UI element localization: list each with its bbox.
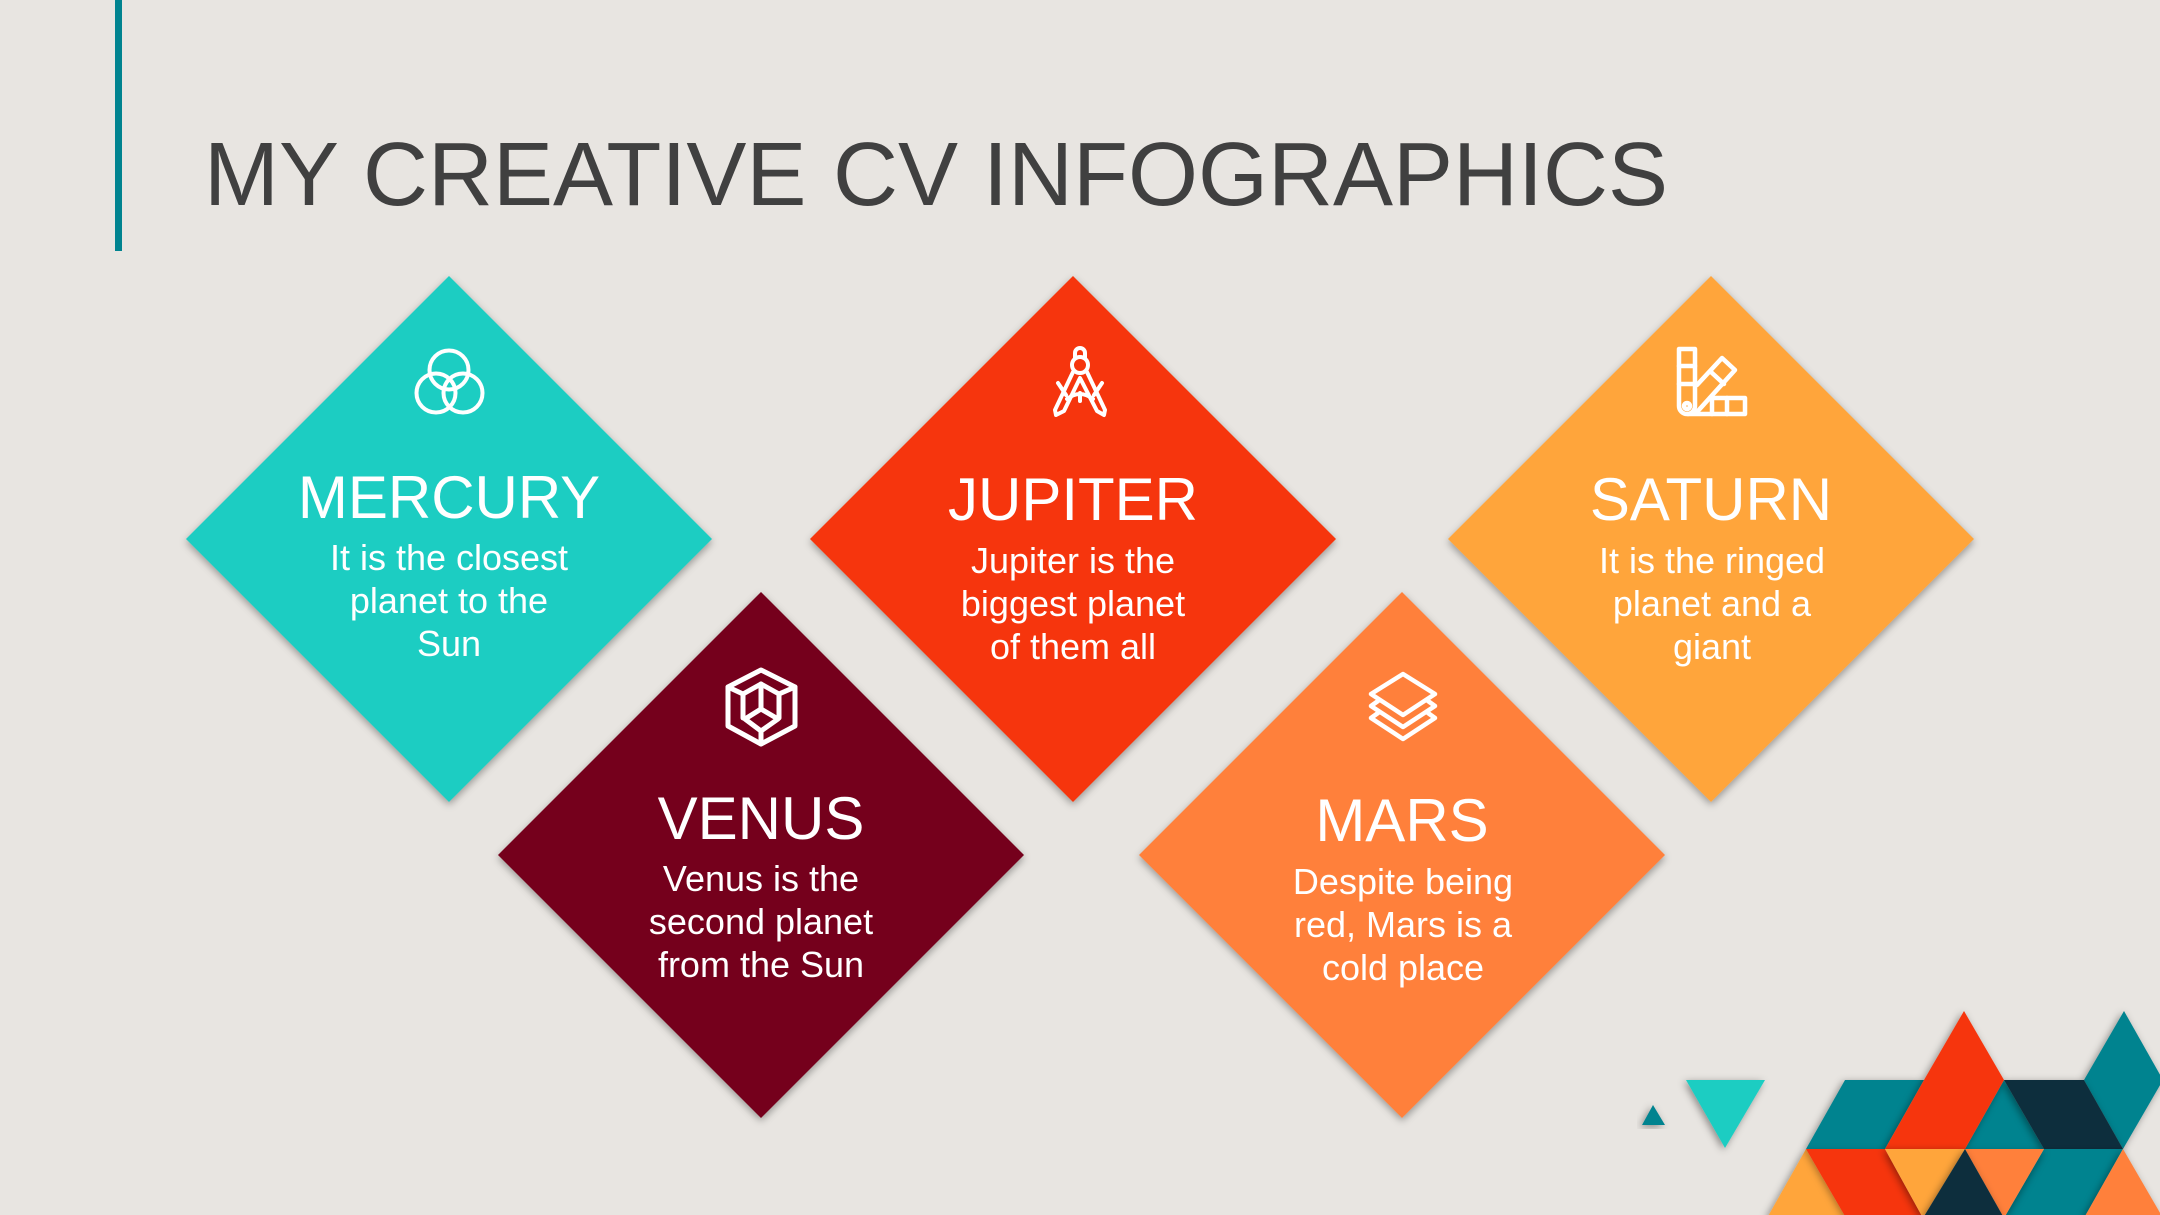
text: saturn description: giant xyxy=(1673,626,1751,667)
text: saturn description: It is the ringed xyxy=(1599,540,1825,581)
icon: colour swatches xyxy=(1679,349,1745,414)
icon: hexagonal cube xyxy=(728,670,795,744)
heading: mars: MARS xyxy=(1315,787,1489,854)
title: CV xyxy=(833,125,958,225)
accent bar xyxy=(115,0,122,251)
text: saturn description xyxy=(1599,540,1825,667)
icon: overlapping circles xyxy=(416,350,482,412)
heading: venus: VENUS xyxy=(658,785,864,852)
heading: saturn: SATURN xyxy=(1590,466,1832,533)
text: jupiter description: Jupiter is the xyxy=(971,540,1175,581)
panel: saturn xyxy=(1448,276,1974,802)
text: venus description: Venus is the xyxy=(663,858,859,899)
panel: mercury xyxy=(186,276,712,802)
text: mercury description xyxy=(330,537,568,664)
panel: venus xyxy=(498,592,1024,1118)
text: jupiter description: biggest planet xyxy=(961,583,1185,624)
text: jupiter description xyxy=(961,540,1185,667)
text: mercury description: It is the closest xyxy=(330,537,568,578)
icon: stacked layers xyxy=(1371,674,1435,739)
text: jupiter description: of them all xyxy=(990,626,1156,667)
heading: jupiter: JUPITER xyxy=(948,466,1198,533)
icon: drafting compass xyxy=(1055,348,1105,415)
text: mars description: Despite being xyxy=(1293,861,1513,902)
text: mars description xyxy=(1293,861,1513,988)
text: mars description: red, Mars is a xyxy=(1294,904,1513,945)
text: mars description: cold place xyxy=(1322,947,1484,988)
panel: jupiter xyxy=(810,276,1336,802)
text: venus description xyxy=(649,858,873,985)
title: CREATIVE xyxy=(363,125,806,225)
decorative triangle mosaic xyxy=(1767,1011,2160,1215)
text: mercury description: Sun xyxy=(417,623,481,664)
text: venus description: from the Sun xyxy=(658,944,864,985)
heading: mercury: MERCURY xyxy=(298,464,600,531)
icon: small teal triangle xyxy=(1642,1105,1665,1125)
text: venus description: second planet xyxy=(649,901,873,942)
text: mercury description: planet to the xyxy=(350,580,548,621)
title: INFOGRAPHICS xyxy=(983,125,1668,225)
text: saturn description: planet and a xyxy=(1613,583,1812,624)
icon: cyan triangle xyxy=(1686,1080,1765,1148)
panel: mars xyxy=(1139,592,1665,1118)
title: MY xyxy=(204,125,337,225)
